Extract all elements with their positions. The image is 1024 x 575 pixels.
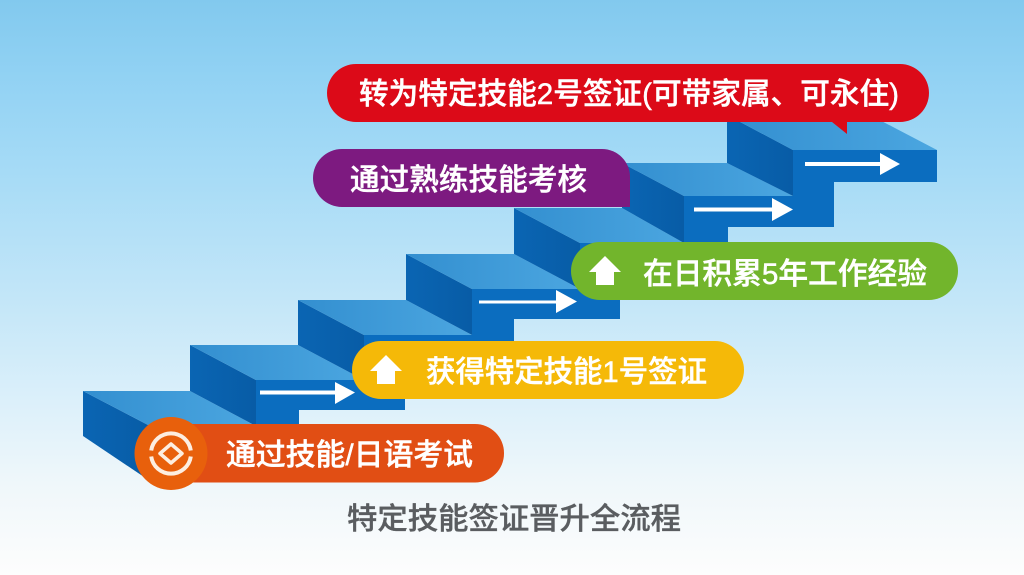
staircase (83, 115, 937, 481)
step 6 (622, 163, 833, 243)
text: test pass: 通过技能/日语考试 (226, 439, 473, 472)
label: visa 2 (327, 64, 929, 134)
arrow: step 2 (260, 382, 355, 404)
arrow: step 6 (694, 198, 793, 221)
step 3 (298, 300, 514, 380)
text: skill exam: 通过熟练技能考核 (350, 164, 587, 197)
step 2 (190, 345, 405, 426)
arrow: step 7 (805, 153, 900, 175)
arrow: step 4 (479, 290, 577, 313)
label: test pass (134, 417, 504, 490)
label: five years (571, 242, 958, 300)
label: visa 1 (352, 341, 744, 399)
text: visa 2: 转为特定技能2号签证(可带家属、可永住) (359, 78, 899, 111)
step 4 (406, 254, 620, 335)
icon: orange circle badge (134, 417, 208, 490)
text: visa 1: 获得特定技能1号签证 (426, 356, 707, 389)
label: skill exam (313, 149, 630, 207)
icon: up arrow (370, 355, 402, 384)
text: five years: 在日积累5年工作经验 (643, 258, 927, 291)
step 7 (727, 115, 937, 227)
step 5 (514, 208, 728, 289)
icon: up arrow (589, 256, 621, 285)
step 1 (83, 391, 299, 481)
caption: 特定技能签证晋升全流程 (347, 503, 681, 536)
